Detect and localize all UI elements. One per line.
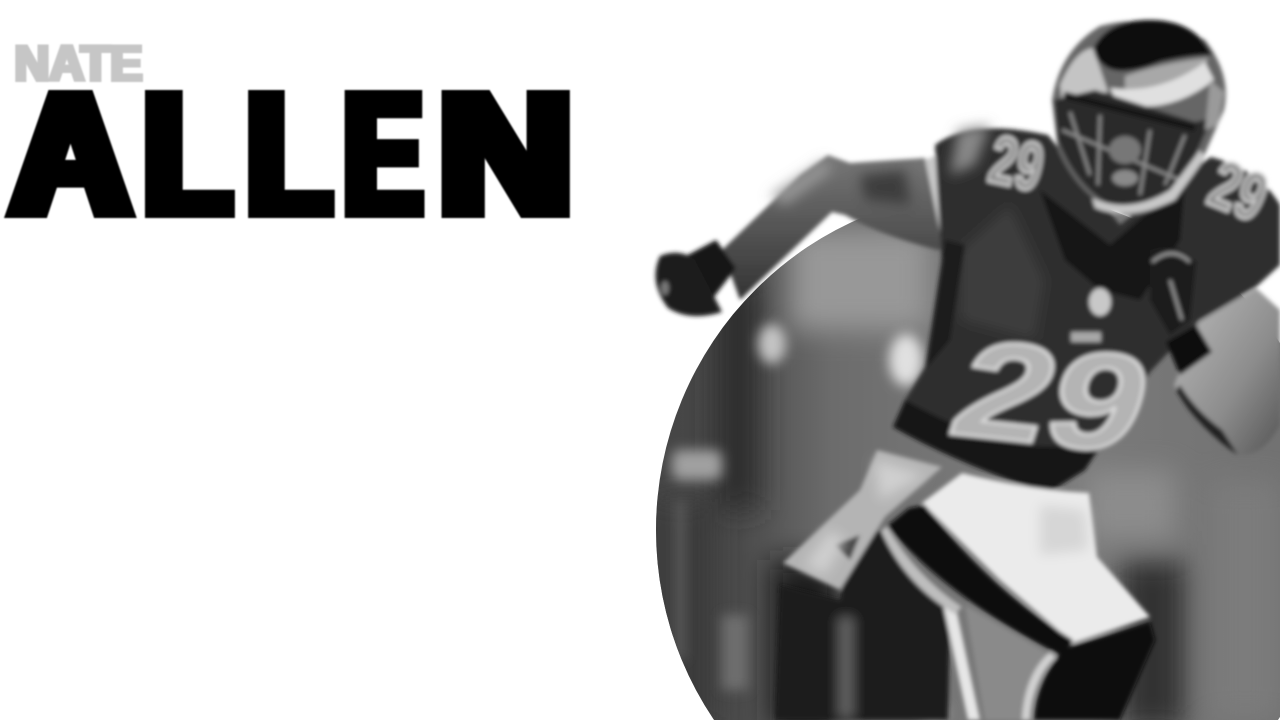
first name: NATE: NATE <box>14 36 142 92</box>
front leg sock <box>1034 622 1155 720</box>
last name: ALLEN: N <box>439 56 572 250</box>
last name: ALLEN: L <box>248 56 330 250</box>
jersey <box>893 125 1280 493</box>
last name: ALLEN: A <box>11 56 130 250</box>
background photo circle <box>640 180 1280 720</box>
number 29 on left shoulder: 29 <box>983 121 1050 206</box>
player figure <box>656 20 1280 720</box>
helmet <box>1052 20 1226 216</box>
last name: ALLEN: E <box>345 56 421 250</box>
last name: ALLEN <box>11 56 572 250</box>
raised arm <box>656 150 955 316</box>
number 29 on chest: 29 <box>936 312 1169 481</box>
waist towel <box>783 450 942 590</box>
jersey numbers <box>936 121 1278 481</box>
last name: ALLEN: L <box>144 56 231 250</box>
shorts <box>887 473 1150 656</box>
rear leg and boot <box>775 526 1056 720</box>
right arm <box>1166 288 1280 455</box>
